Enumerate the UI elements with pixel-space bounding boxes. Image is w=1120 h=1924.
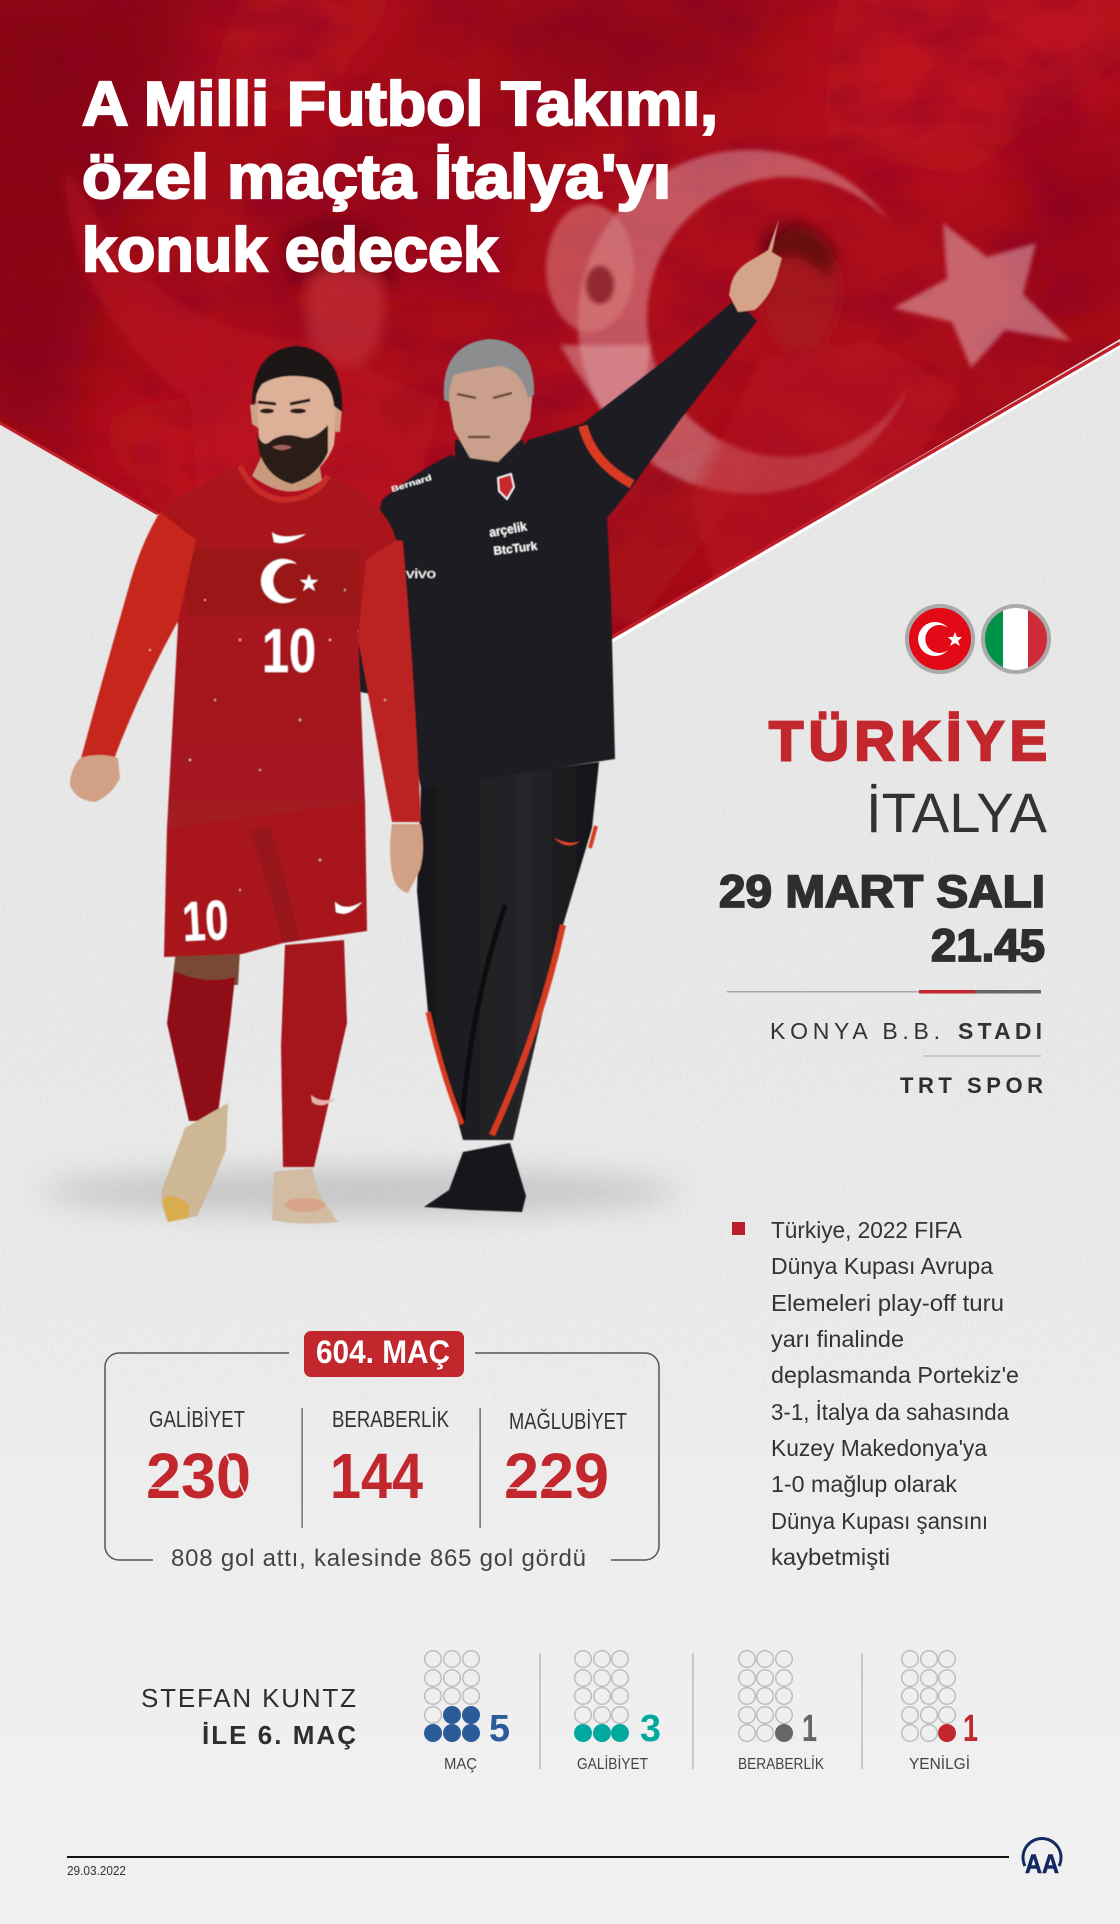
coach hair bbox=[444, 339, 534, 402]
summary paragraph: deplasmanda Portekiz'e bbox=[771, 1362, 1019, 1388]
player knee skin bbox=[172, 950, 240, 985]
sock swoosh bbox=[311, 1095, 336, 1105]
summary paragraph: kaybetmişti bbox=[771, 1544, 890, 1570]
coach logos: vivo bbox=[406, 566, 436, 581]
ghost player center bbox=[546, 204, 650, 440]
summary paragraph: Elemeleri play-off turu bbox=[771, 1290, 1004, 1316]
ground shadow bbox=[40, 1170, 680, 1214]
stat: losses: MAĞLUBİYET bbox=[509, 1408, 627, 1434]
shorts number: 10 bbox=[181, 888, 230, 953]
coach logos: BtcTurk bbox=[493, 539, 538, 558]
coach trousers bbox=[417, 762, 599, 1140]
team: İtalya: İTALYA bbox=[866, 781, 1048, 844]
player shirt chest band bbox=[187, 550, 360, 615]
summary paragraph: 1-0 mağlup olarak bbox=[771, 1471, 957, 1497]
stat: wins: GALİBİYET bbox=[149, 1406, 245, 1432]
player right sleeve bbox=[358, 540, 421, 822]
ghost player left bbox=[63, 170, 435, 508]
dot matrix: losses bbox=[902, 1651, 978, 1773]
venue bbox=[770, 1018, 1042, 1044]
ghost crescent on flag bbox=[578, 150, 910, 494]
summary paragraph: 3-1, İtalya da sahasında bbox=[771, 1399, 1009, 1425]
coach logos bbox=[390, 473, 538, 581]
dot matrix: matches: 5 bbox=[489, 1708, 510, 1750]
panel: match record bbox=[105, 1331, 659, 1572]
player shorts bbox=[164, 800, 367, 957]
summary paragraph: yarı finalinde bbox=[771, 1326, 904, 1352]
player right shoe bbox=[272, 1168, 338, 1224]
team: Türkiye: TÜRKİYE bbox=[769, 709, 1047, 772]
stat: losses bbox=[504, 1408, 627, 1512]
left shoe toe bbox=[162, 1196, 190, 1222]
venue: STADI bbox=[958, 1018, 1042, 1044]
red flag banner background bbox=[0, 0, 1120, 638]
ghost star on flag bbox=[893, 223, 1071, 368]
dot matrix: draws: BERABERLİK bbox=[738, 1754, 824, 1773]
coach sleeve stripe bbox=[583, 426, 632, 484]
bullet marker bbox=[732, 1222, 745, 1235]
title: özel maçta İtalya'yı bbox=[82, 143, 671, 212]
dot matrix: draws bbox=[738, 1651, 824, 1773]
info divider bbox=[727, 990, 1041, 994]
shirt swoosh bbox=[272, 532, 306, 543]
player hands bbox=[70, 755, 423, 893]
ghost player right bbox=[693, 216, 947, 574]
coach logos: Bernard bbox=[390, 473, 433, 494]
player head bbox=[256, 356, 338, 483]
stat: draws: 144 bbox=[330, 1440, 423, 1512]
title: A Milli Futbol Takımı, bbox=[82, 70, 718, 139]
shorts swoosh bbox=[335, 902, 362, 914]
icon: AA logo bbox=[1023, 1839, 1061, 1879]
flag: Italy bbox=[983, 606, 1050, 672]
player left shoe bbox=[162, 1103, 228, 1222]
player right sock bbox=[281, 940, 347, 1167]
player neck bbox=[252, 455, 322, 492]
goals note: 808 gol attı, kalesinde 865 gol gördü bbox=[171, 1545, 586, 1572]
dot matrix: wins: 3 bbox=[640, 1708, 661, 1750]
match date: 29 MART SALI bbox=[719, 866, 1045, 917]
stat: draws: BERABERLİK bbox=[332, 1406, 450, 1432]
title bbox=[82, 70, 718, 285]
player left sleeve bbox=[80, 512, 196, 762]
dot matrix: losses: YENİLGİ bbox=[909, 1754, 970, 1773]
coach trouser stripes bbox=[428, 826, 596, 1135]
coach trousers swoosh bbox=[554, 838, 580, 845]
shirt star bbox=[300, 574, 318, 591]
publication date: 29.03.2022 bbox=[67, 1863, 126, 1878]
coach logos: arçelik bbox=[488, 518, 529, 540]
icon: AA logo: AA bbox=[1025, 1849, 1059, 1879]
venue: KONYA B.B. bbox=[770, 1018, 940, 1044]
dot matrix: wins bbox=[574, 1651, 661, 1773]
banner edge lines bbox=[0, 343, 1120, 643]
summary paragraph: Kuzey Makedonya'ya bbox=[771, 1435, 987, 1461]
player brows bbox=[258, 400, 310, 404]
coach jacket bbox=[351, 299, 757, 788]
dot matrix: matches bbox=[424, 1651, 510, 1773]
stat: wins bbox=[146, 1406, 251, 1512]
flag: Turkey bbox=[907, 606, 973, 672]
player beard bbox=[257, 425, 328, 484]
player collar bbox=[240, 466, 328, 500]
player ears bbox=[250, 403, 342, 432]
coach heading: STEFAN KUNTZ bbox=[141, 1683, 356, 1713]
coach heading bbox=[141, 1683, 356, 1750]
coach leg fold bbox=[462, 905, 505, 1124]
summary paragraph bbox=[771, 1217, 1019, 1570]
coach figure bbox=[351, 219, 782, 1212]
summary paragraph: Dünya Kupası Avrupa bbox=[771, 1253, 993, 1279]
dot matrix: wins: GALİBİYET bbox=[577, 1754, 648, 1773]
coach neck bbox=[455, 440, 530, 478]
rain speckles bbox=[149, 589, 386, 891]
stat: draws bbox=[330, 1406, 450, 1512]
player mouth bbox=[272, 445, 292, 450]
shirt number: 10 bbox=[262, 617, 316, 686]
match time: 21.45 bbox=[931, 920, 1045, 971]
panel frame bbox=[105, 1353, 659, 1560]
coach shoes bbox=[424, 1143, 526, 1212]
player eyes bbox=[260, 408, 306, 414]
player hair bbox=[252, 346, 342, 412]
shirt crescent bbox=[261, 559, 297, 603]
summary paragraph: Türkiye, 2022 FIFA bbox=[771, 1217, 963, 1243]
match count badge: 604. MAÇ bbox=[316, 1334, 450, 1370]
title: konuk edecek bbox=[82, 216, 499, 285]
player figure bbox=[70, 346, 423, 1224]
coach brow and mouth bbox=[457, 393, 512, 437]
coach hand bbox=[729, 219, 782, 312]
summary paragraph: Dünya Kupası şansını bbox=[771, 1508, 988, 1534]
coach heading: İLE 6. MAÇ bbox=[202, 1720, 356, 1750]
broadcaster: TRT SPOR bbox=[900, 1073, 1043, 1098]
dot matrix: losses: 1 bbox=[963, 1708, 978, 1750]
stat: wins: 230 bbox=[146, 1440, 251, 1512]
player shorts fold bbox=[250, 826, 300, 943]
dot matrix: draws: 1 bbox=[802, 1708, 817, 1750]
dot matrix: matches: MAÇ bbox=[444, 1756, 477, 1773]
stat: losses: 229 bbox=[504, 1440, 609, 1512]
player left sock bbox=[167, 971, 235, 1121]
right shoe highlight bbox=[285, 1198, 325, 1212]
coach head bbox=[446, 340, 533, 462]
player shirt bbox=[160, 466, 396, 828]
